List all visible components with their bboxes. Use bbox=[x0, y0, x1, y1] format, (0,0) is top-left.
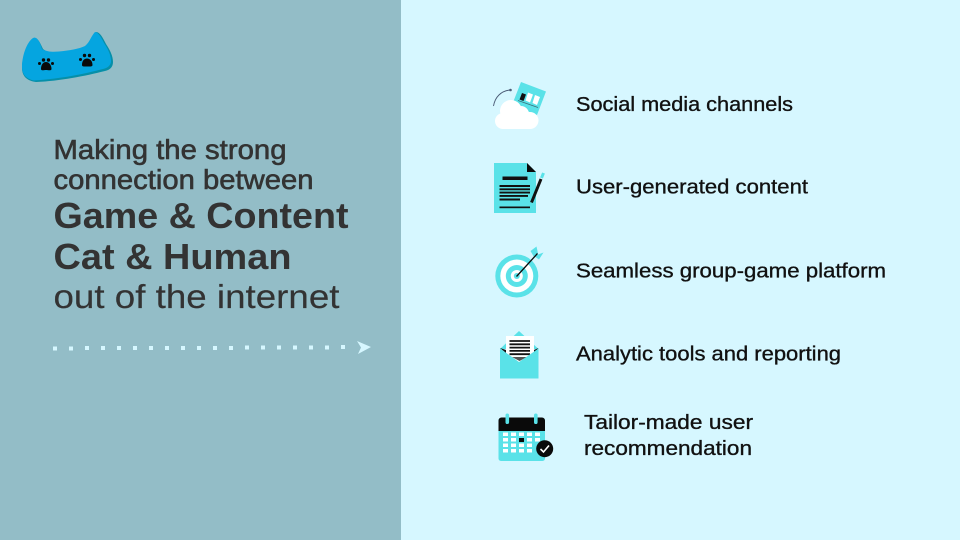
headline text block: Game & Content bbox=[54, 195, 349, 236]
label: social media channels: Social media channels bbox=[576, 93, 793, 116]
icon: cloud and floppy disk bbox=[494, 82, 546, 129]
icon: target with arrow bbox=[495, 246, 544, 298]
dotted arrow bbox=[53, 341, 371, 354]
icon: envelope with letter bbox=[500, 331, 538, 378]
label: tailor-made user recommendation bbox=[584, 411, 753, 460]
headline text block: out of the internet bbox=[54, 278, 340, 315]
logo: cat head with paws bbox=[22, 32, 113, 82]
label: tailor-made user recommendation: recommendation bbox=[584, 437, 752, 460]
left background panel bbox=[0, 0, 401, 540]
icon: document and pen bbox=[494, 163, 544, 213]
label: user-generated content: User-generated content bbox=[576, 176, 808, 198]
headline text block: Cat & Human bbox=[54, 236, 292, 277]
label: tailor-made user recommendation: Tailor-made user bbox=[584, 411, 753, 434]
headline text block: Making the strong bbox=[54, 134, 286, 165]
icon: calendar with check bbox=[498, 414, 553, 461]
label: seamless group-game platform: Seamless group-game platform bbox=[576, 260, 886, 282]
headline text block: connection between bbox=[54, 164, 314, 195]
paw right bbox=[79, 54, 95, 67]
label: analytic tools and reporting: Analytic tools and reporting bbox=[576, 342, 841, 366]
right background panel bbox=[401, 0, 960, 540]
paw left bbox=[38, 58, 54, 70]
headline text block bbox=[54, 134, 349, 315]
